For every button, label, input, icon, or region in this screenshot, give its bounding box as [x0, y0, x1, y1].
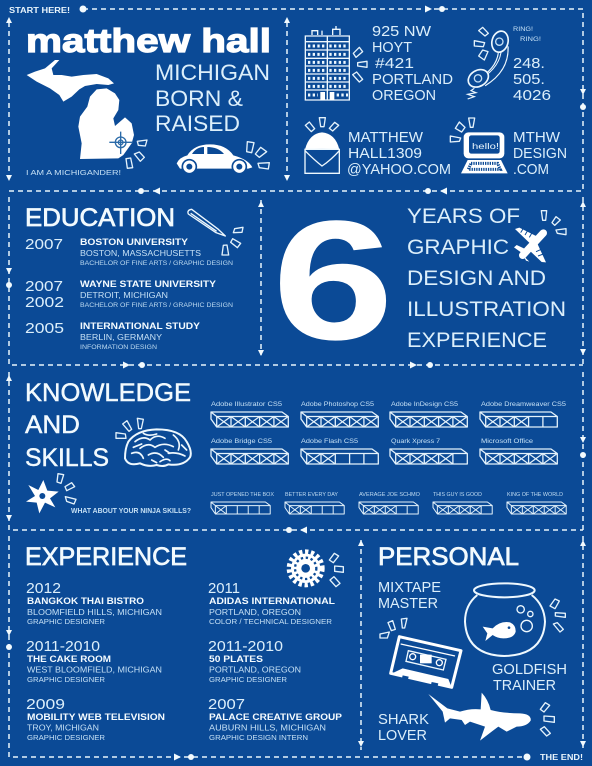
- experience text: GRAPHIC: [407, 236, 509, 259]
- legend: average joe schmo: [359, 492, 421, 514]
- legend: just opened the box: [211, 492, 274, 514]
- heading: EDUCATION: [25, 204, 175, 232]
- job: palace creative group: [208, 696, 343, 742]
- heading: EXPERIENCE: [25, 543, 187, 571]
- entry: wayne state: DETROIT, MICHIGAN: [80, 291, 168, 300]
- address: #421: [375, 55, 414, 72]
- big number: 6: [272, 186, 394, 376]
- entry: boston: [25, 236, 233, 267]
- entry: wayne state: BACHELOR OF FINE ARTS / GRAPHIC DESIGN: [80, 302, 233, 309]
- icon: ninja star: [26, 474, 76, 513]
- ring text: RING!: [513, 26, 533, 33]
- address: [372, 23, 453, 104]
- job: cake room: GRAPHIC DESIGNER: [27, 675, 106, 684]
- skill: illustrator: [211, 401, 288, 427]
- michigan text: [155, 60, 270, 136]
- icon: car: [177, 142, 269, 174]
- entry: international study: 2005: [25, 320, 64, 337]
- job: cake room: WEST BLOOMFIELD, MICHIGAN: [27, 666, 162, 674]
- michigan text: BORN &: [155, 86, 243, 111]
- heading: KNOWLEDGE: [25, 379, 191, 407]
- skill: dreamweaver: Adobe Dreamweaver CS5: [481, 401, 566, 408]
- entry: wayne state: [25, 278, 233, 311]
- entry: boston: 2007: [25, 236, 63, 253]
- heading: SKILLS: [25, 444, 109, 472]
- icon: brain: [116, 418, 191, 466]
- skill: photoshop: [301, 401, 378, 427]
- address: 925 NW: [372, 23, 432, 40]
- legend: this guy is good: [433, 492, 492, 514]
- skill: quark: Quark Xpress 7: [391, 438, 440, 445]
- job: 50 plates: 50 PLATES: [209, 654, 263, 665]
- icon: gear: [289, 552, 343, 587]
- goldfish text: [492, 661, 567, 694]
- entry: boston: BOSTON, MASSACHUSETTS: [80, 249, 201, 258]
- phone number: 505.: [513, 71, 545, 88]
- job: cake room: 2011-2010: [26, 638, 100, 655]
- ninja caption: WHAT ABOUT YOUR NINJA SKILLS?: [71, 508, 191, 515]
- address: OREGON: [372, 87, 436, 104]
- skill: illustrator: Adobe Illustrator CS5: [211, 401, 282, 408]
- job: cake room: THE CAKE ROOM: [27, 654, 111, 665]
- ring text: [513, 26, 541, 43]
- job: palace creative group: 2007: [208, 696, 245, 713]
- website: DESIGN: [513, 145, 567, 162]
- shark text: SHARK: [378, 711, 429, 728]
- job: 50 plates: GRAPHIC DESIGNER: [209, 675, 288, 684]
- icon: computer: [450, 118, 508, 173]
- goldfish text: GOLDFISH: [492, 661, 567, 678]
- legend: just opened the box: JUST OPENED THE BOX: [211, 492, 274, 498]
- shark text: [378, 711, 429, 744]
- legend: king of the world: KING OF THE WORLD: [507, 492, 563, 498]
- skill: flash: Adobe Flash CS5: [301, 438, 358, 445]
- panel: contact: [305, 23, 567, 178]
- website: .COM: [513, 161, 549, 178]
- skill: office: [480, 438, 557, 464]
- skill: photoshop: Adobe Photoshop CS5: [301, 401, 374, 408]
- job: 50 plates: 2011-2010: [208, 638, 283, 655]
- job: bangkok thai bistro: GRAPHIC DESIGNER: [27, 617, 106, 626]
- job: cake room: [26, 638, 162, 684]
- experience text: ILLUSTRATION: [407, 298, 566, 321]
- michigander caption: I AM A MICHIGANDER!: [26, 168, 121, 177]
- entry: international study: INFORMATION DESIGN: [80, 344, 157, 351]
- skill: quark: [390, 438, 467, 464]
- job: mobility web television: [26, 696, 165, 742]
- job: bangkok thai bistro: 2012: [26, 580, 61, 597]
- legend: this guy is good: THIS GUY IS GOOD: [433, 492, 482, 498]
- entry: boston: BACHELOR OF FINE ARTS / GRAPHIC DESIGN: [80, 260, 233, 267]
- skill: flash: [301, 438, 378, 464]
- job: mobility web television: TROY, MICHIGAN: [27, 724, 99, 732]
- job: 50 plates: PORTLAND, OREGON: [209, 666, 301, 674]
- mixtape text: MIXTAPE: [378, 579, 441, 596]
- job: palace creative group: PALACE CREATIVE GROUP: [209, 712, 343, 723]
- job: 50 plates: [208, 638, 301, 684]
- start label: START HERE!: [9, 6, 70, 15]
- heading: PERSONAL: [378, 543, 519, 571]
- icon: envelope: [305, 118, 339, 173]
- email: HALL1309: [348, 145, 422, 162]
- address: PORTLAND: [372, 71, 453, 88]
- experience text: DESIGN AND: [407, 267, 546, 290]
- skill: office: Microsoft Office: [481, 438, 533, 445]
- email: MATTHEW: [348, 129, 424, 146]
- ring text: RING!: [520, 36, 541, 43]
- phone number: 4026: [513, 87, 551, 104]
- entry: wayne state: 2007: [25, 278, 63, 295]
- panel: education: [25, 204, 243, 351]
- job: bangkok thai bistro: BANGKOK THAI BISTRO: [27, 596, 144, 607]
- icon: airplane: [514, 211, 566, 262]
- email: [347, 129, 451, 178]
- entry: boston: BOSTON UNIVERSITY: [80, 237, 189, 248]
- entry: wayne state: 2002: [25, 294, 64, 311]
- skill: indesign: Adobe InDesign CS5: [391, 401, 458, 408]
- legend: king of the world: [507, 492, 566, 514]
- job: bangkok thai bistro: [26, 580, 162, 626]
- legend: better every day: [285, 492, 344, 514]
- entry: international study: INTERNATIONAL STUDY: [80, 321, 201, 332]
- icon: computer: hello!: [472, 142, 499, 151]
- entry: wayne state: WAYNE STATE UNIVERSITY: [80, 279, 217, 290]
- icon: telephone: [465, 27, 510, 99]
- goldfish text: TRAINER: [493, 677, 556, 694]
- icon: building: [305, 26, 367, 100]
- entry: international study: BERLIN, GERMANY: [80, 333, 163, 342]
- job: adidas international: ADIDAS INTERNATIONAL: [209, 596, 335, 607]
- job: adidas international: COLOR / TECHNICAL DESIGNER: [209, 617, 333, 626]
- skill: dreamweaver: [480, 401, 566, 427]
- phone number: [513, 55, 551, 104]
- michigan text: RAISED: [155, 111, 240, 136]
- job: bangkok thai bistro: BLOOMFIELD HILLS, MICHIGAN: [27, 608, 162, 617]
- icon: cassette: [380, 618, 461, 687]
- phone number: 248.: [513, 55, 545, 72]
- job: mobility web television: MOBILITY WEB TELEVISION: [27, 712, 165, 723]
- end label: THE END!: [540, 753, 583, 762]
- michigan text: MICHIGAN: [155, 60, 270, 85]
- icon: michigan map: [27, 60, 147, 168]
- experience text: EXPERIENCE: [407, 329, 547, 352]
- job: adidas international: [208, 580, 335, 626]
- mixtape text: [378, 579, 441, 612]
- entry: international study: [25, 320, 201, 351]
- address: HOYT: [372, 39, 412, 56]
- job: palace creative group: GRAPHIC DESIGN INTERN: [209, 733, 308, 742]
- job: adidas international: 2011: [208, 580, 240, 597]
- legend: average joe schmo: AVERAGE JOE SCHMO: [359, 492, 421, 498]
- panel: intro: [26, 60, 270, 177]
- experience text: YEARS OF: [407, 205, 520, 228]
- legend: better every day: BETTER EVERY DAY: [285, 492, 338, 498]
- panel: experience: [25, 543, 343, 742]
- panel: personal: [378, 543, 567, 744]
- panel: knowledge and skills: [25, 379, 566, 515]
- website: MTHW: [513, 129, 561, 146]
- title: matthew hall: [26, 22, 271, 59]
- heading: [25, 379, 191, 472]
- mixtape text: MASTER: [378, 595, 438, 612]
- experience text: [407, 205, 566, 352]
- website: [513, 129, 567, 178]
- job: adidas international: PORTLAND, OREGON: [209, 608, 301, 617]
- skill: bridge: Adobe Bridge CS5: [211, 438, 272, 445]
- heading: AND: [25, 411, 80, 439]
- email: @YAHOO.COM: [347, 161, 451, 178]
- shark text: LOVER: [378, 727, 427, 744]
- job: mobility web television: 2009: [26, 696, 65, 713]
- skill: indesign: [390, 401, 467, 427]
- icon: shark: [428, 693, 554, 741]
- icon: pencil: [188, 209, 243, 255]
- icon: fishbowl: [465, 583, 565, 656]
- panel: years of experience: [272, 186, 566, 376]
- job: palace creative group: AUBURN HILLS, MICHIGAN: [209, 724, 326, 732]
- skill: bridge: [211, 438, 288, 464]
- job: mobility web television: GRAPHIC DESIGNER: [27, 733, 106, 742]
